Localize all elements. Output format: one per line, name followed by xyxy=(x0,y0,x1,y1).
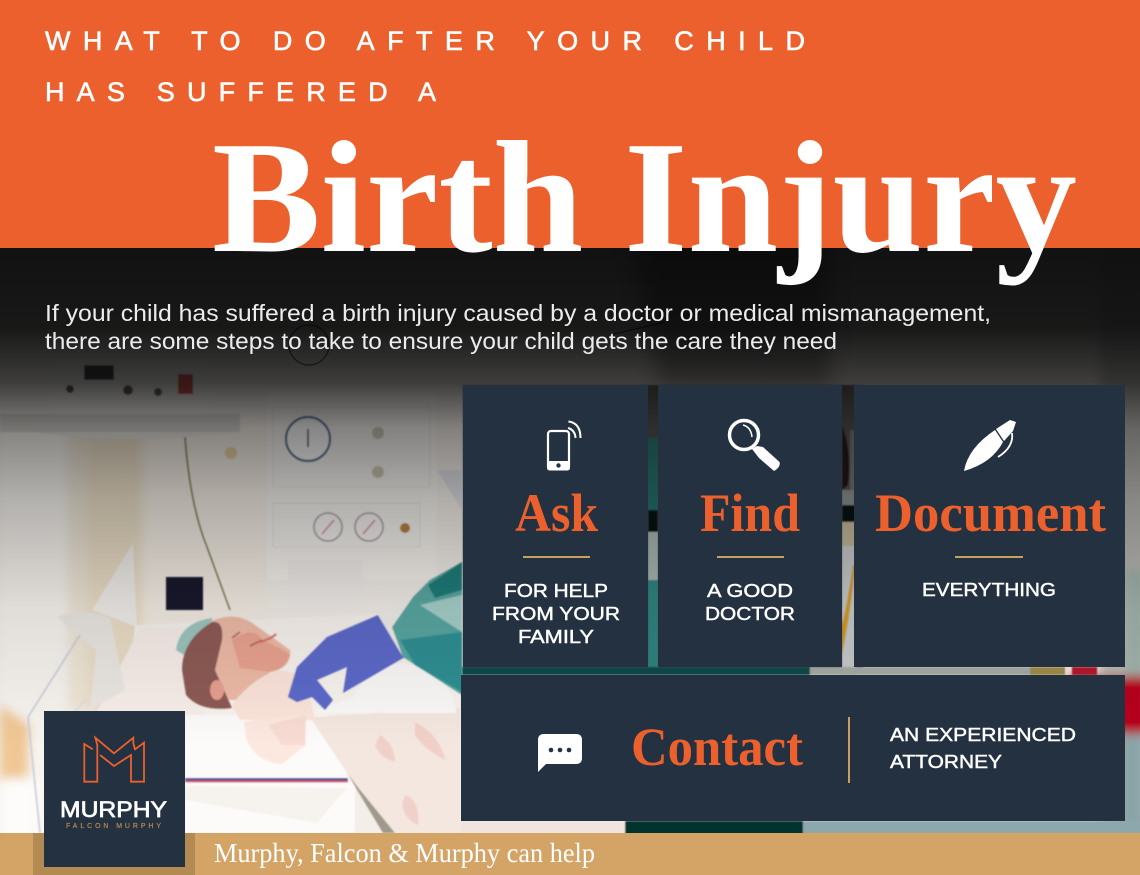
heading eyebrow xyxy=(45,26,805,107)
label: everything: EVERYTHING xyxy=(922,579,1056,600)
panel: Contact xyxy=(461,675,1125,821)
intro paragraph: there are some steps to take to ensure your child gets the care they need xyxy=(45,328,837,354)
label: for help from your family: FAMILY xyxy=(518,626,594,647)
label: a good doctor xyxy=(705,580,795,624)
label: a good doctor: A GOOD xyxy=(707,580,793,601)
logo tagline: FALCON MURPHY xyxy=(66,823,161,830)
word: Contact: Contact xyxy=(631,717,803,777)
icon: smartphone with signal xyxy=(547,422,580,470)
panel: Find xyxy=(658,385,842,667)
logo wordmark: MURPHY xyxy=(60,797,167,822)
panel: Document xyxy=(854,385,1125,667)
bassinet and blankets xyxy=(28,543,460,838)
doctor hair in shadow xyxy=(630,235,830,385)
intro paragraph xyxy=(45,300,991,354)
word: Ask: Ask xyxy=(515,483,598,543)
gauge in shadow xyxy=(289,322,665,365)
word: Document: Document xyxy=(875,483,1106,543)
newborn baby xyxy=(176,617,315,764)
label: an experienced attorney xyxy=(890,724,1076,772)
blue glove and teal gown xyxy=(288,562,462,710)
background photo: newborn in hospital bassinet xyxy=(0,235,1140,848)
label: a good doctor: DOCTOR xyxy=(705,603,795,624)
icon: pen xyxy=(964,420,1016,471)
monitoring equipment xyxy=(0,360,462,610)
footer text: Murphy, Falcon & Murphy can help xyxy=(214,838,595,868)
logo: Murphy Falcon Murphy xyxy=(44,711,185,867)
intro paragraph: If your child has suffered a birth injury caused by a doctor or medical mismanagement, xyxy=(45,300,991,326)
icon: magnifying glass xyxy=(730,420,780,471)
word: Find: Find xyxy=(700,483,800,543)
logo mark xyxy=(84,738,144,782)
footer band xyxy=(0,833,1140,875)
photo visible in the gaps around panels xyxy=(461,385,1140,835)
label: for help from your family: FROM YOUR xyxy=(492,603,620,624)
icon: chat bubble xyxy=(538,734,582,772)
header band xyxy=(0,0,1140,248)
label: for help from your family xyxy=(492,580,620,647)
label: for help from your family: FOR HELP xyxy=(504,580,608,601)
dark top fade over photo xyxy=(0,248,1140,838)
heading eyebrow: WHAT TO DO AFTER YOUR CHILD xyxy=(45,26,805,56)
label: an experienced attorney: ATTORNEY xyxy=(890,751,1002,772)
heading eyebrow: HAS SUFFERED A xyxy=(45,77,436,107)
title: Birth Injury: Birth Injury xyxy=(212,108,1077,286)
panel: Ask xyxy=(463,385,648,667)
label: an experienced attorney: AN EXPERIENCED xyxy=(890,724,1076,745)
